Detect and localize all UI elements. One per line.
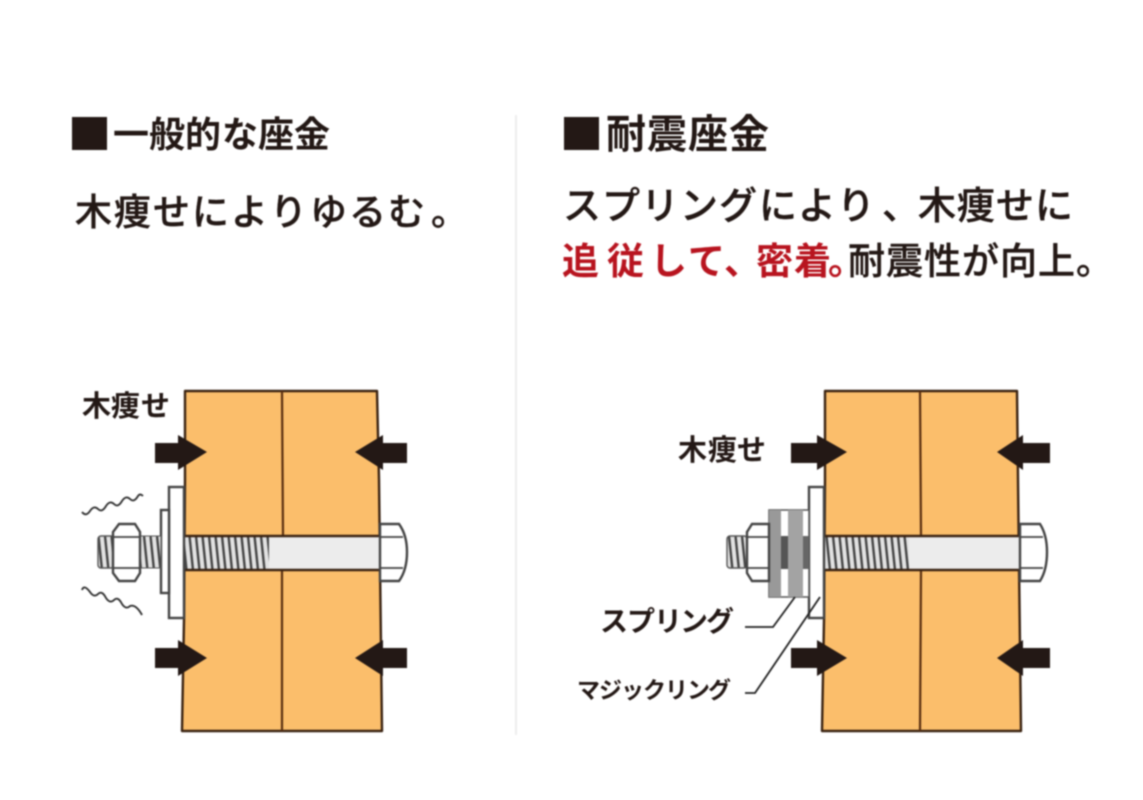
bolt shaft: [183, 536, 379, 570]
thread behind nut: [140, 536, 161, 568]
leader: spring: [745, 597, 795, 627]
arrows: wood shrinkage: [791, 435, 1050, 676]
wood block: [182, 391, 382, 731]
large washer: [169, 487, 184, 618]
wood seam: [282, 391, 283, 731]
arrows: wood shrinkage: [155, 435, 407, 676]
nut: [113, 524, 140, 581]
thread end: [727, 536, 747, 568]
wood block: [822, 391, 1021, 731]
leader: magic ring: [745, 597, 820, 693]
bolt head: [380, 524, 407, 581]
text: spring follows shrinkage: [562, 186, 1113, 282]
text: wood shrinkage loosens: 木痩せによりゆるむ。: [75, 192, 468, 233]
heading: seismic washer: 耐震座金: [606, 113, 769, 157]
heading: general washer: 一般的な座金: [113, 114, 330, 155]
spring washers: [769, 510, 809, 597]
label: spring: スプリング: [600, 605, 734, 637]
diagram: seismic washer bolt: [577, 391, 1050, 731]
bolt shaft: [824, 536, 1020, 570]
text: spring follows shrinkage: スプリングにより、木痩せに: [563, 186, 1073, 228]
vibration waves: [82, 494, 143, 615]
diagram: general washer bolt: [82, 390, 407, 731]
text: spring follows shrinkage: 追従して、密着。: [562, 241, 865, 282]
label: wood shrinkage: 木痩せ: [82, 390, 170, 423]
label: magic ring: マジックリング: [577, 677, 731, 703]
label: wood shrinkage: 木痩せ: [678, 434, 766, 467]
panel: seismic washer: [562, 113, 1113, 731]
small washer: [161, 510, 169, 593]
nut: [747, 524, 769, 581]
wood seam: [920, 391, 921, 731]
bolt head: [1020, 524, 1047, 581]
thread end: [98, 536, 114, 568]
divider between panels: [515, 115, 517, 735]
text: spring follows shrinkage: 耐震性が向上。: [848, 241, 1113, 282]
panel: general washer: [72, 114, 468, 731]
magic ring washer: [809, 487, 824, 618]
